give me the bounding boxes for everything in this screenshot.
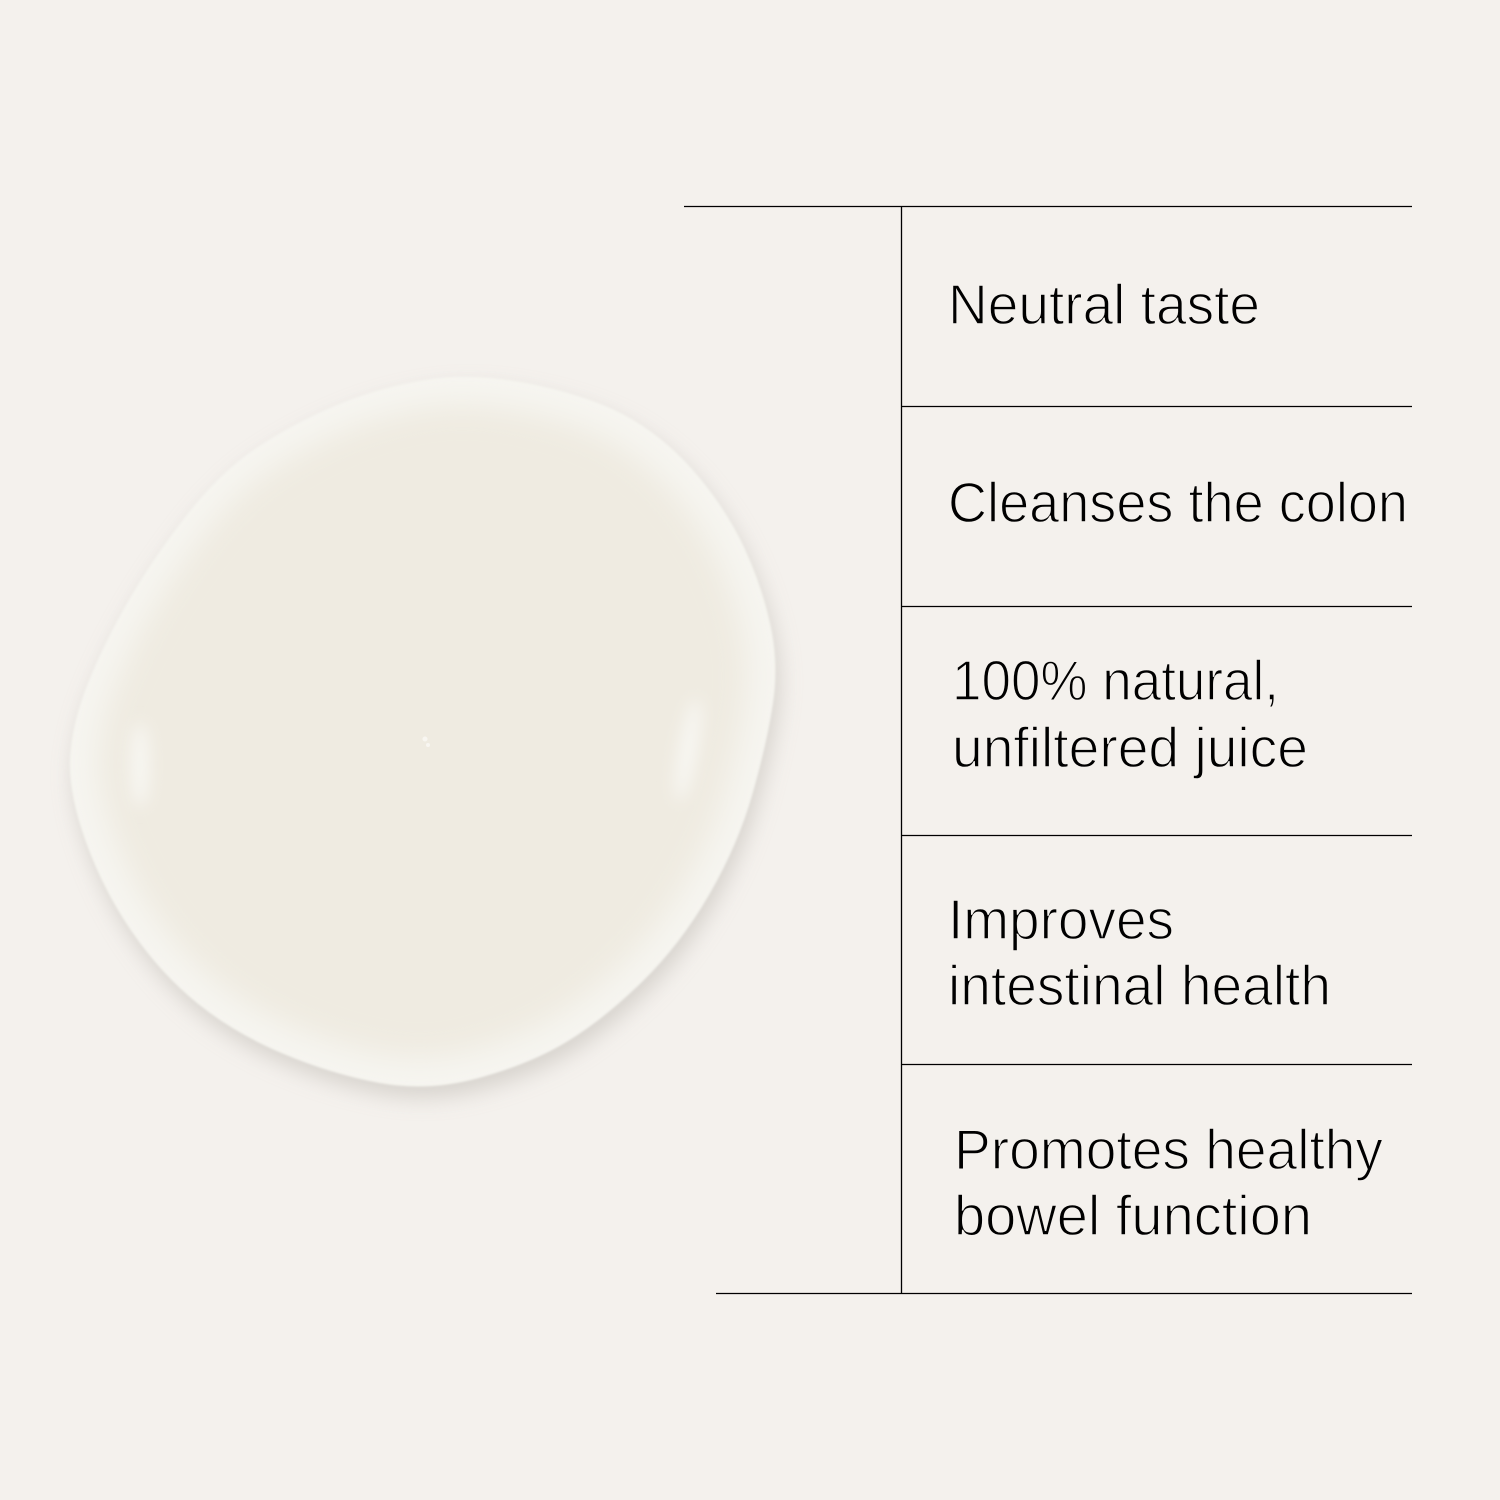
table rules (684, 206, 1412, 1294)
benefit: improves intestinal health: Improves (948, 888, 1174, 952)
benefit: cleanses the colon: Cleanses the colon (948, 471, 1408, 535)
benefit: promotes healthy bowel function: bowel function (954, 1184, 1312, 1248)
benefit: 100% natural, unfiltered juice: 100% natural, (952, 649, 1279, 713)
benefit: improves intestinal health: intestinal health (948, 954, 1331, 1018)
infographic canvas (66, 206, 1412, 1294)
benefit: promotes healthy bowel function (954, 1118, 1383, 1248)
benefit: neutral taste: Neutral taste (948, 273, 1260, 337)
juice droplet (70, 377, 779, 1098)
benefit: 100% natural, unfiltered juice (952, 649, 1308, 780)
benefit: 100% natural, unfiltered juice: unfiltered juice (952, 716, 1308, 780)
benefit: improves intestinal health (948, 888, 1331, 1018)
benefit: promotes healthy bowel function: Promotes healthy (954, 1118, 1383, 1182)
